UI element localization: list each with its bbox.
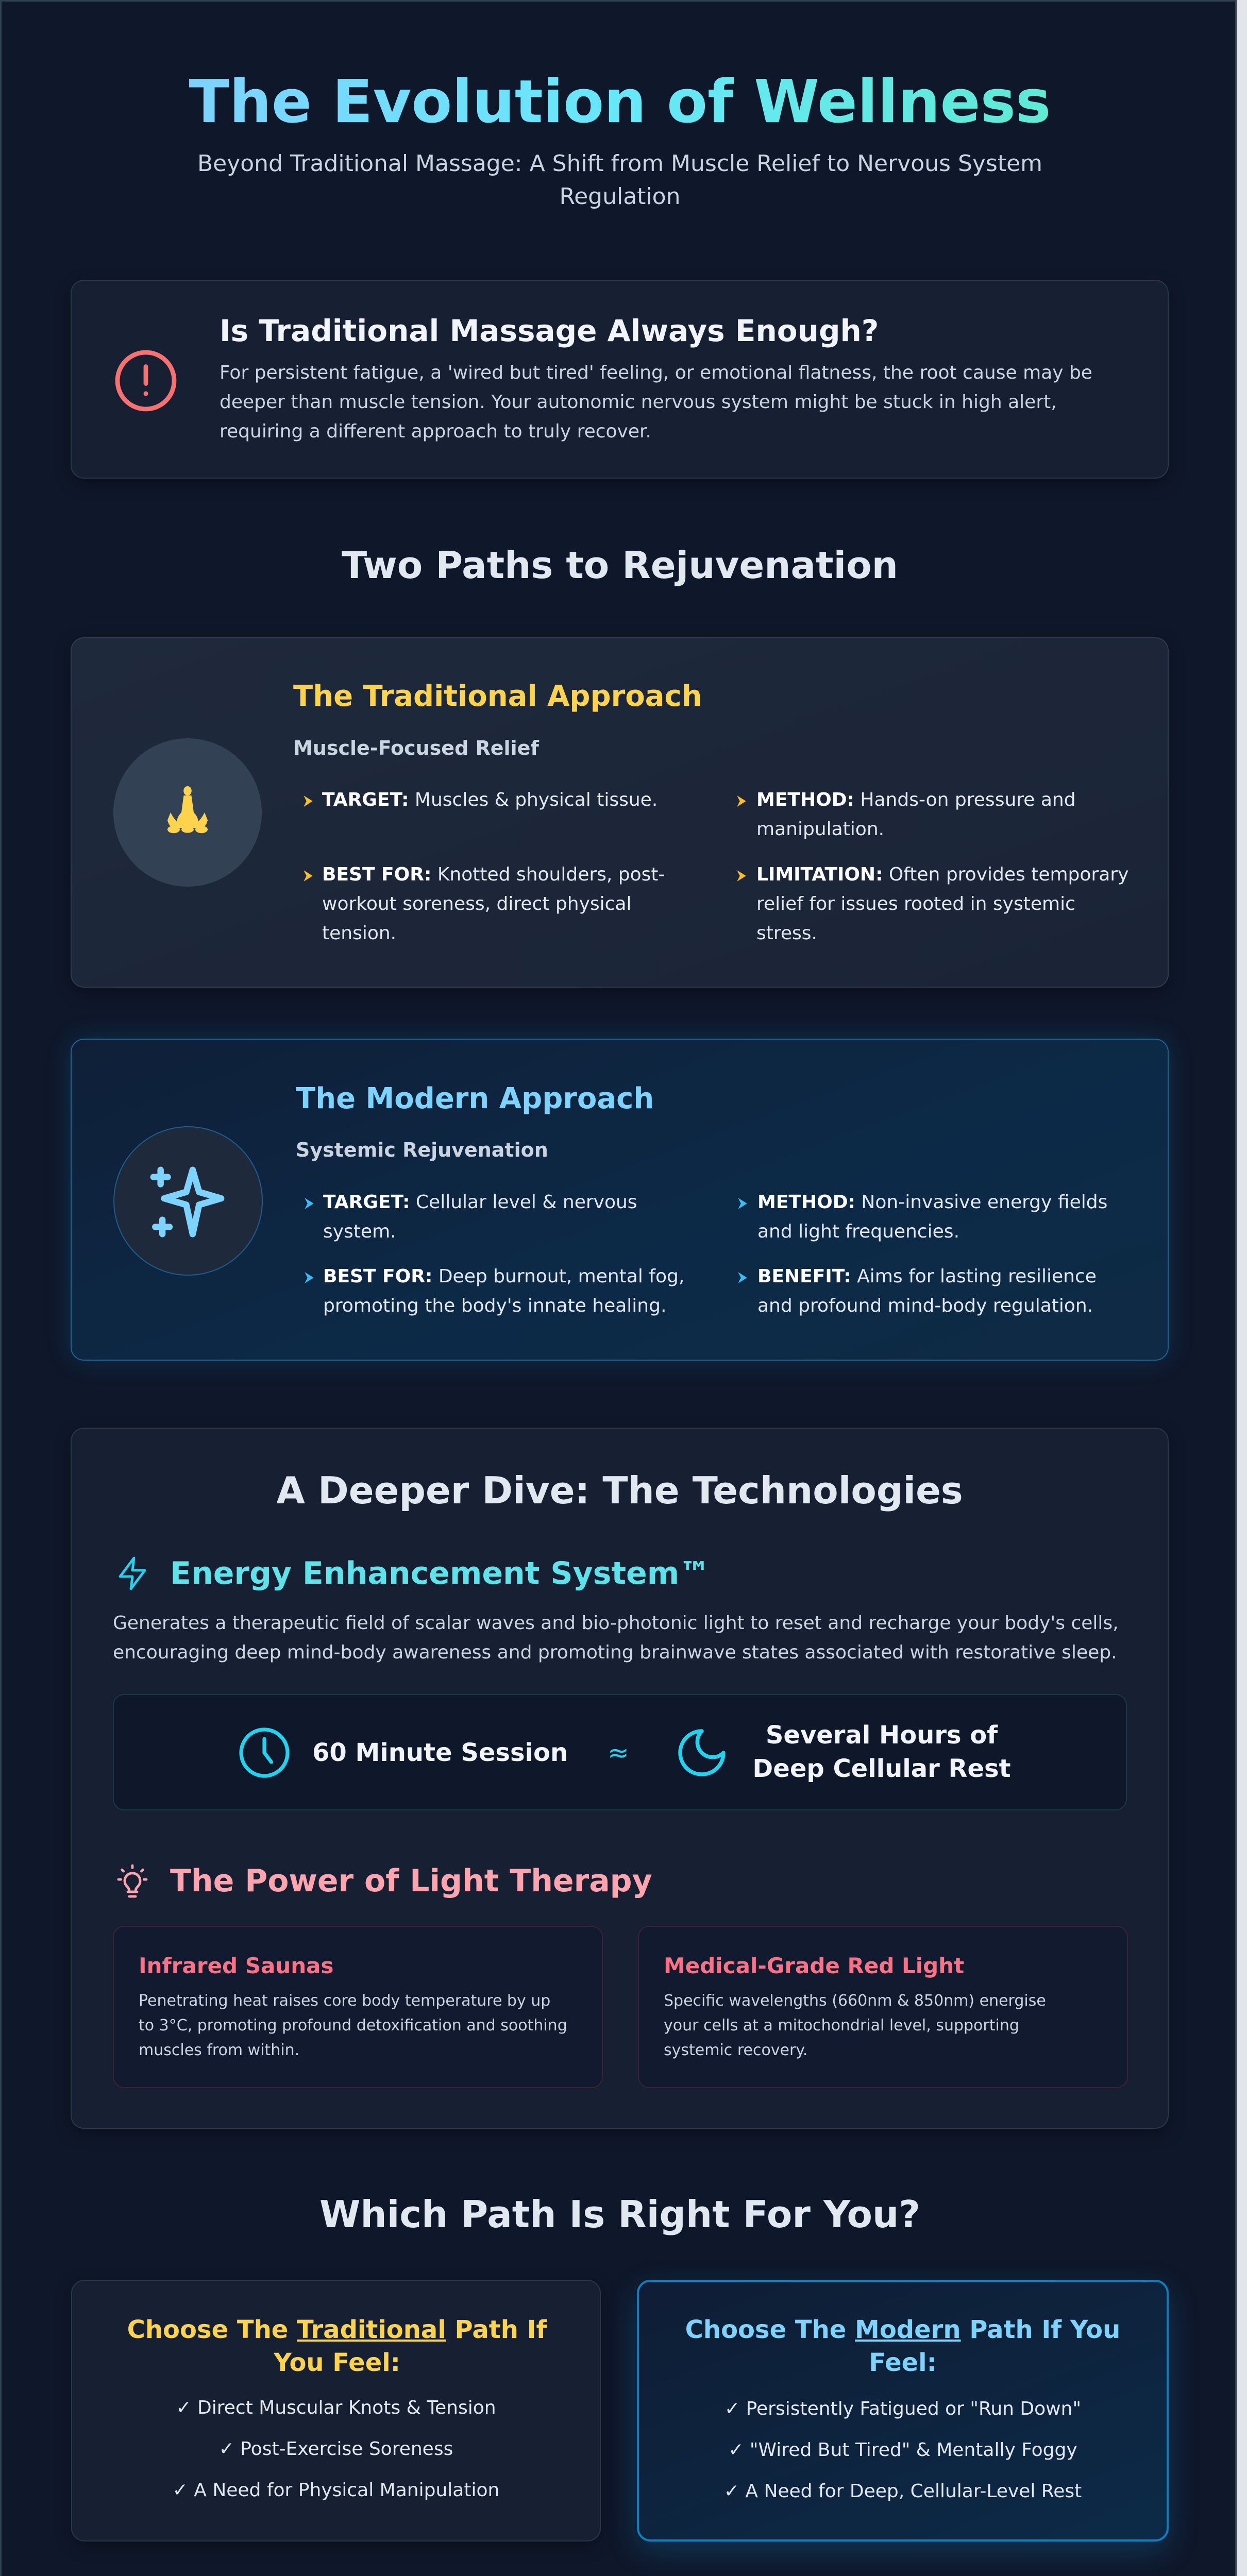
- modern title: The Modern Approach: [296, 1082, 654, 1115]
- icon: massage: [113, 738, 262, 887]
- stat: rest: Several Hours of: [766, 1721, 998, 1750]
- panel: technologies: [71, 1428, 1169, 2129]
- title: The Evolution of Wellness: [189, 67, 1051, 137]
- traditional checklist: [173, 2397, 499, 2501]
- bullet: benefit: BENEFIT: Aims for lasting resilience and profound mind-body regulation.: [757, 1266, 1097, 1316]
- modern subtitle: Systemic Rejuvenation: [296, 1139, 548, 1161]
- modern checklist: ✓ A Need for Deep, Cellular-Level Rest: [724, 2481, 1082, 2502]
- bullet: limitation: LIMITATION: Often provides temporary relief for issues rooted in systemic stress.: [756, 864, 1128, 944]
- panel: choose traditional: [71, 2280, 601, 2541]
- energy heading: Energy Enhancement System™: [170, 1555, 710, 1591]
- icon: clock: [239, 1727, 290, 1778]
- traditional choose heading: Choose The Traditional Path If You Feel:: [127, 2315, 547, 2377]
- alert body: For persistent fatigue, a 'wired but tired' feeling, or emotional flatness, the root cause may be deeper than muscle tension. Your autonomic nervous system might be stuck in high alert, requiring a different approach to truly recover.: [220, 362, 1092, 442]
- traditional subtitle: Muscle-Focused Relief: [293, 737, 539, 759]
- bullet: best for: BEST FOR: Knotted shoulders, post-workout soreness, direct physical tension.: [322, 864, 665, 944]
- light therapy heading: The Power of Light Therapy: [170, 1863, 652, 1899]
- icon: bulb: [117, 1864, 147, 1898]
- modern choose heading: Choose The Modern Path If You Feel:: [685, 2315, 1120, 2377]
- modern checklist: [724, 2398, 1082, 2502]
- modern checklist: ✓ Persistently Fatigued or "Run Down": [724, 2398, 1081, 2419]
- red light body: Specific wavelengths (660nm & 850nm) energise your cells at a mitochondrial level, supporting systemic recovery.: [664, 1992, 1046, 2059]
- bullet: best for: BEST FOR: Deep burnout, mental fog, promoting the body's innate healing.: [323, 1266, 684, 1316]
- traditional title: The Traditional Approach: [293, 680, 702, 713]
- bullet: method: METHOD: Hands-on pressure and manipulation.: [756, 789, 1076, 840]
- bullet: target: TARGET: Cellular level & nervous system.: [323, 1192, 637, 1242]
- bullet: target: TARGET: Muscles & physical tissue.: [322, 789, 658, 810]
- panel: modern approach: [71, 1039, 1169, 1361]
- icon: moon: [678, 1729, 726, 1776]
- icon: approx: ≈: [608, 1738, 629, 1768]
- infrared heading: Infrared Saunas: [139, 1953, 333, 1978]
- infrared body: Penetrating heat raises core body temperature by up to 3°C, promoting profound detoxification and soothing muscles from within.: [139, 1992, 567, 2059]
- traditional checklist: ✓ Direct Muscular Knots & Tension: [176, 2397, 496, 2418]
- traditional checklist: ✓ Post-Exercise Soreness: [219, 2438, 453, 2460]
- stat: rest: [752, 1721, 1011, 1783]
- stat box: [113, 1694, 1127, 1810]
- heading: two paths: Two Paths to Rejuvenation: [342, 544, 898, 587]
- stat: rest: Deep Cellular Rest: [752, 1754, 1011, 1783]
- modern checklist: ✓ "Wired But Tired" & Mentally Foggy: [728, 2439, 1077, 2461]
- card: infrared saunas: [113, 1926, 603, 2088]
- technologies heading: A Deeper Dive: The Technologies: [276, 1469, 963, 1512]
- alert heading: Is Traditional Massage Always Enough?: [220, 313, 879, 348]
- panel: traditional approach: [71, 637, 1169, 988]
- red light heading: Medical-Grade Red Light: [664, 1953, 964, 1978]
- subtitle: Beyond Traditional Massage: A Shift from Muscle Relief to Nervous System Regulation: [197, 150, 1042, 210]
- panel: choose modern: [637, 2280, 1169, 2541]
- icon: sparkles: [113, 1126, 263, 1276]
- icon: lightning: [119, 1557, 146, 1590]
- bullet: method: METHOD: Non-invasive energy fields and light frequencies.: [757, 1192, 1107, 1242]
- traditional checklist: ✓ A Need for Physical Manipulation: [173, 2480, 499, 2501]
- card: red light: [638, 1926, 1128, 2088]
- energy paragraph: Generates a therapeutic field of scalar waves and bio-photonic light to reset and recharge your body's cells, encouraging deep mind-body awareness and promoting brainwave states associated with restorative sleep.: [113, 1613, 1119, 1663]
- heading: which path: Which Path Is Right For You?: [319, 2193, 920, 2236]
- stat: session: 60 Minute Session: [312, 1738, 568, 1767]
- panel: alert: [71, 280, 1169, 479]
- icon: alert: [115, 350, 176, 411]
